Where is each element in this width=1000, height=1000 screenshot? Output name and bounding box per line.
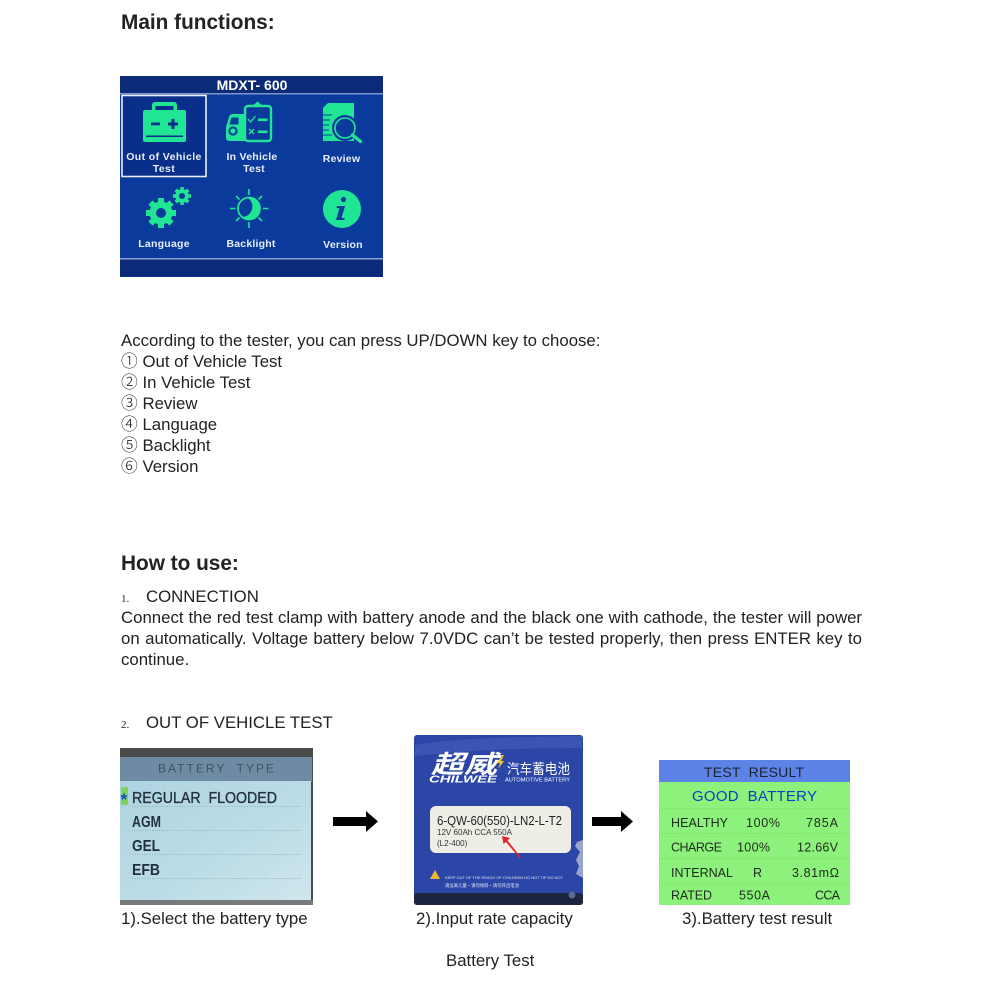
text block: step 2 heading — [121, 713, 333, 732]
result rows: HEALTHY — [671, 816, 729, 830]
selected cell: out of vehicle test — [122, 96, 206, 176]
heading: how to use: How to use: — [121, 552, 239, 575]
caption: battery test result: 3).Battery test result — [682, 909, 832, 928]
cell: review — [323, 103, 361, 165]
photo: battery label — [414, 735, 583, 905]
screen title: MDXT- 600 — [217, 77, 288, 93]
text block: step 1 connection — [121, 587, 862, 669]
option list: EFB — [132, 862, 160, 879]
cell: backlight — [226, 189, 276, 250]
cell: backlight: Backlight — [226, 238, 276, 250]
heading: main functions: Main functions: — [121, 11, 275, 34]
icon: document and magnifier — [323, 103, 360, 142]
caption: input rate capacity: 2).Input rate capacity — [416, 909, 573, 928]
icon: gears — [146, 187, 191, 228]
result rows: 550A — [739, 888, 771, 902]
option list: REGULAR FLOODED — [132, 790, 277, 807]
warning strip — [430, 870, 564, 889]
text block: function list — [121, 331, 600, 477]
cell: language — [138, 187, 191, 250]
text block: function list: ③ Review — [121, 390, 197, 414]
text block: step 1 connection: Connect the red test clamp with battery anode and the black one with cathode, the tester will power — [121, 608, 862, 627]
white sticker: 12V 60Ah CCA 550A — [437, 827, 512, 837]
result rows: 785A — [806, 816, 839, 830]
text block: function list: ④ Language — [121, 411, 217, 435]
arrow: step 1 to step 2 — [333, 811, 378, 832]
label: Out of Vehicle — [126, 151, 202, 163]
verdict: GOOD BATTERY — [692, 788, 817, 805]
selection marker: * — [120, 790, 128, 809]
text block: function list: ② In Vehicle Test — [121, 369, 250, 393]
text block: step 1 connection: on automatically. Voltage battery below 7.0VDC can’t be tested properly, then press ENTER key to — [121, 629, 862, 648]
cell: version: Version — [323, 239, 363, 251]
option list: AGM — [132, 814, 161, 831]
brand — [429, 745, 571, 786]
white sticker: (L2-400) — [437, 839, 468, 848]
brand: AUTOMOTIVE BATTERY — [505, 778, 571, 784]
text block: function list: ① Out of Vehicle Test — [121, 348, 282, 372]
screen: test result — [659, 760, 850, 905]
result rows: CHARGE — [671, 840, 722, 854]
cell: review: Review — [323, 153, 361, 165]
text block: step 2 heading: 2. — [121, 719, 129, 731]
caption: battery test: Battery Test — [446, 951, 534, 970]
icon: info circle — [323, 190, 361, 228]
cell: language: Language — [138, 238, 190, 250]
label: Test — [153, 163, 175, 175]
result rows — [671, 816, 841, 902]
brand: CHILWEE — [429, 774, 497, 786]
text: OUT OF VEHICLE TEST — [146, 713, 333, 732]
screen title: TEST RESULT — [704, 764, 804, 780]
cell: in vehicle test: Test — [243, 163, 265, 175]
brand: 超威 — [431, 745, 502, 781]
arrow: step 2 to step 3 — [592, 811, 633, 832]
result rows: CCA — [815, 888, 841, 902]
result rows: 100% — [746, 816, 780, 830]
screen: battery type — [120, 748, 313, 905]
result rows: 3.81mΩ — [792, 866, 839, 880]
result rows: 100% — [737, 840, 770, 854]
warning strip: KEEP OUT OF THE REACH OF CHILDREN DO NOT TIP DO NOT — [445, 876, 564, 880]
text block: function list: ⑤ Backlight — [121, 432, 211, 456]
torn corner — [575, 840, 583, 878]
warning strip: 请远离儿童・请勿倾斜・请勿开启电池 — [445, 882, 519, 889]
result rows: R — [753, 866, 762, 880]
result rows: RATED — [671, 888, 712, 902]
text block: function list: According to the tester, you can press UP/DOWN key to choose: — [121, 331, 600, 350]
icon: truck and checklist — [226, 102, 271, 141]
screen title: BATTERY TYPE — [158, 762, 274, 776]
option list — [132, 790, 277, 879]
text block: step 1 connection: continue. — [121, 650, 189, 669]
cell: version — [323, 190, 363, 251]
text block: function list: ⑥ Version — [121, 453, 198, 477]
caption: select battery type: 1).Select the battery type — [121, 909, 308, 928]
result rows: INTERNAL — [671, 866, 733, 880]
cell: in vehicle test: In Vehicle — [227, 151, 277, 163]
brand: 汽车蓄电池 — [507, 759, 570, 779]
white sticker — [430, 806, 571, 853]
option list: GEL — [132, 838, 160, 855]
icon: battery — [143, 102, 186, 142]
white sticker: 6-QW-60(550)-LN2-L-T2 — [437, 813, 562, 828]
text block: step 1 connection: 1. — [121, 593, 129, 605]
result rows: 12.66V — [797, 840, 839, 854]
panel: MDXT-600 menu screen — [120, 76, 383, 277]
text block: step 1 connection: CONNECTION — [146, 587, 259, 606]
cell: in vehicle test — [226, 102, 277, 175]
red arrow — [502, 836, 521, 858]
icon: sun and moon — [230, 189, 268, 228]
